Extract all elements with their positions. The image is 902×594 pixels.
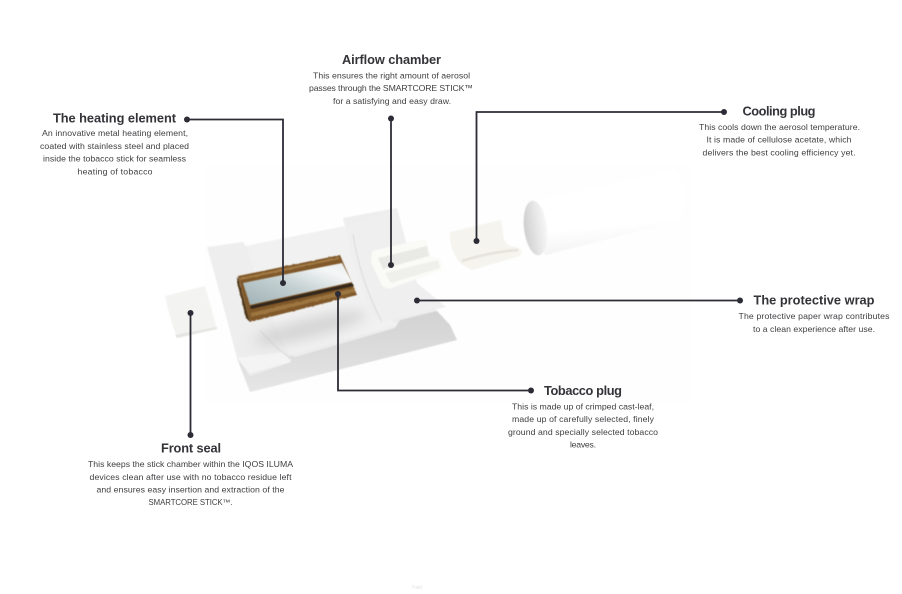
protective wrap description: to a clean experience after use. xyxy=(753,324,875,334)
airflow chamber description xyxy=(309,70,473,106)
front seal description: and ensures easy insertion and extraction of the xyxy=(96,484,285,494)
front seal description: SMARTCORE STICK™. xyxy=(148,498,232,507)
heating element description: heating of tobacco xyxy=(78,166,153,176)
front seal description: devices clean after use with no tobacco residue left xyxy=(90,472,292,482)
protective wrap heading: The protective wrap xyxy=(754,292,875,308)
airflow chamber description: for a satisfying and easy draw. xyxy=(333,96,451,106)
heating element description: An innovative metal heating element, xyxy=(42,128,188,138)
cooling plug heading: Cooling plug xyxy=(742,104,816,118)
protective wrap leader line xyxy=(414,298,743,304)
tobacco plug with steel heating element xyxy=(237,255,357,322)
heating element description xyxy=(40,128,189,176)
callout: airflow chamber xyxy=(309,52,473,268)
protective wrap description: The protective paper wrap contributes xyxy=(738,311,890,321)
photo backdrop xyxy=(205,165,692,402)
heating element description: coated with stainless steel and placed xyxy=(40,141,189,151)
heating element leader line xyxy=(184,116,286,286)
shadow under tobacco plug xyxy=(251,304,369,352)
callout: heating element xyxy=(40,110,286,286)
tobacco plug leader line xyxy=(335,291,534,394)
faint footer mark: Paid xyxy=(412,585,422,591)
protective wrap description xyxy=(738,311,890,334)
cooling plug description xyxy=(699,122,860,158)
airflow chamber piece xyxy=(371,239,442,289)
tobacco plug description: leaves. xyxy=(570,440,596,450)
cooling plug description: This cools down the aerosol temperature. xyxy=(699,122,860,132)
heating element description: inside the tobacco stick for seamless xyxy=(43,154,187,164)
callout: cooling plug xyxy=(474,104,860,244)
front seal heading: Front seal xyxy=(161,440,221,456)
tobacco plug description: ground and specially selected tobacco xyxy=(508,427,658,437)
protective wrap tube xyxy=(521,170,685,257)
tobacco plug description: This is made up of crimped cast-leaf, xyxy=(512,402,654,412)
front seal leader line xyxy=(188,310,194,438)
front seal block xyxy=(165,286,217,338)
cooling plug piece xyxy=(450,220,522,270)
callout: protective wrap xyxy=(414,292,890,334)
cooling plug description: delivers the best cooling efficiency yet. xyxy=(702,148,856,158)
product image: exploded tobacco stick xyxy=(165,165,692,402)
paper wrap sheet xyxy=(207,208,457,392)
front seal description xyxy=(88,459,293,507)
cooling plug description: It is made of cellulose acetate, which xyxy=(706,134,852,144)
front seal description: This keeps the stick chamber within the IQOS ILUMA xyxy=(88,459,293,469)
tobacco plug description xyxy=(508,402,658,450)
airflow chamber description: This ensures the right amount of aerosol xyxy=(313,70,470,80)
callout: front seal xyxy=(88,310,293,507)
tobacco plug heading: Tobacco plug xyxy=(544,383,622,398)
airflow chamber leader line xyxy=(388,116,394,268)
heating element heading: The heating element xyxy=(53,110,177,126)
tobacco plug description: made up of carefully selected, finely xyxy=(512,414,655,424)
callout: tobacco plug xyxy=(335,291,658,450)
airflow chamber description: passes through the SMARTCORE STICK™ xyxy=(309,83,473,93)
airflow chamber heading: Airflow chamber xyxy=(342,52,441,67)
cooling plug leader line xyxy=(474,109,727,244)
